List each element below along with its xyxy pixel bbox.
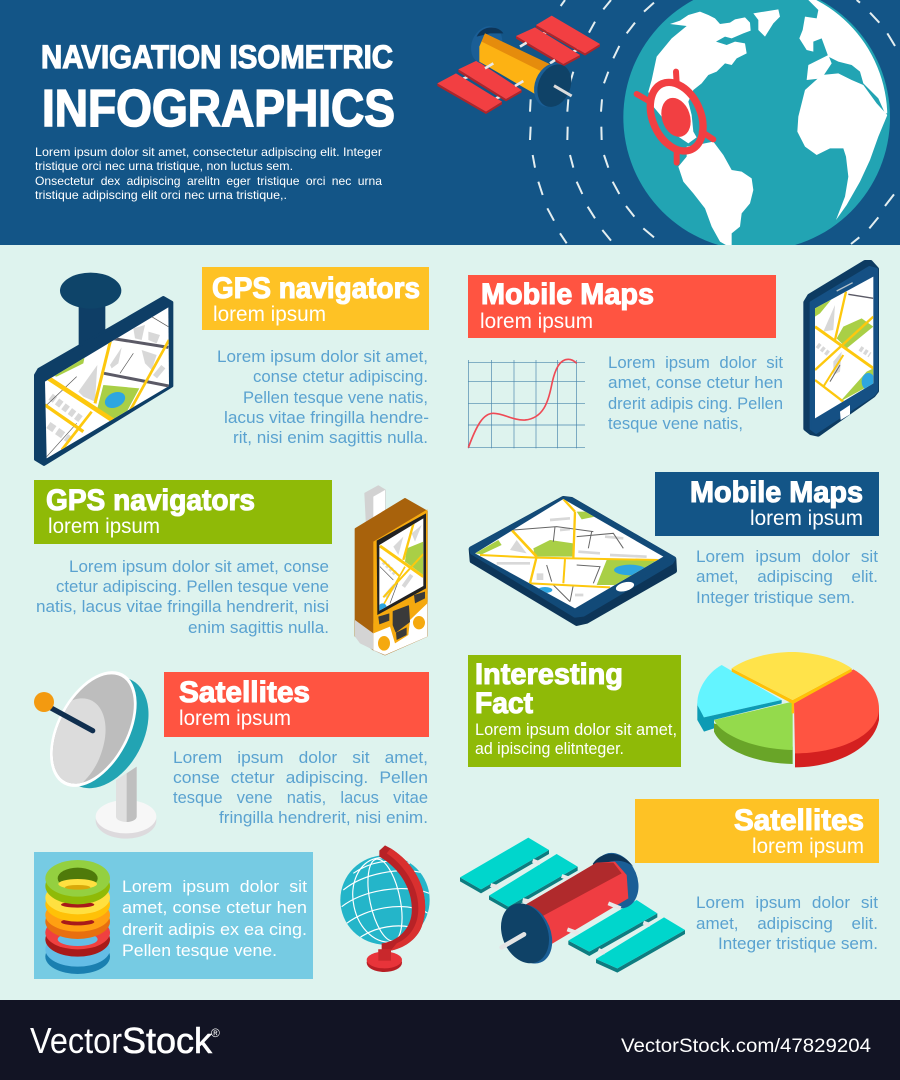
heading: Mobile Maps red: lorem ipsum xyxy=(480,310,593,333)
heading: Mobile Maps red xyxy=(468,275,776,338)
callout: Interesting Fact: Lorem ipsum dolor sit amet, xyxy=(475,720,677,739)
heading: Mobile Maps blue: Mobile Maps xyxy=(690,476,863,509)
footer url: VectorStock.com/47829204 xyxy=(621,1036,871,1057)
text block: GPS navigators: lacus vitae fringilla hendre- xyxy=(224,408,429,427)
icon: car GPS navigator xyxy=(35,273,172,465)
text block: rings callout: Pellen tesque vene. xyxy=(122,941,277,960)
text block: Satellites red: tesque vene natis, lacus vitae xyxy=(173,788,428,807)
panel: Mobile Maps red xyxy=(468,262,877,448)
heading: Satellites yellow: lorem ipsum xyxy=(752,835,864,858)
line chart xyxy=(468,359,585,448)
text block: GPS navigators xyxy=(217,347,429,447)
heading: Satellites red: Satellites xyxy=(179,676,310,709)
text block: GPS navigators: Lorem ipsum dolor sit amet, xyxy=(217,347,428,366)
text block: Mobile Maps red: Lorem ipsum dolor sit xyxy=(608,353,783,372)
text block: rings callout: drerit adipis ex ea cing. xyxy=(122,920,307,939)
text block: Mobile Maps blue: amet, adipiscing elit. xyxy=(696,567,878,586)
text block: Mobile Maps red xyxy=(608,353,783,433)
heading: Satellites red xyxy=(164,672,429,737)
callout: Interesting Fact xyxy=(468,655,681,767)
panel: rings callout xyxy=(34,852,313,979)
text block: GPS navigators: conse ctetur adipiscing. xyxy=(253,367,428,386)
callout: Interesting Fact: ad ipiscing elitnteger. xyxy=(475,739,624,758)
text block: Mobile Maps red: tesque vene natis, xyxy=(608,414,743,433)
panel: GPS navigators car unit xyxy=(35,267,429,465)
text block: GPS navigators: rit, nisi enim sagittis nulla. xyxy=(233,428,428,447)
text block: handheld: natis, lacus vitae fringilla hendrerit, nisi xyxy=(36,597,329,616)
title xyxy=(41,39,395,138)
text block: Satellites red: fringilla hendrerit, nisi enim. xyxy=(219,808,428,827)
text block: Mobile Maps blue: Integer tristique sem. xyxy=(696,588,855,607)
text block: handheld: ctetur adipiscing. Pellen tesque vene xyxy=(56,577,329,596)
icon: stacked rings xyxy=(45,860,110,974)
text block: Satellites yellow: amet, adipiscing elit. xyxy=(696,914,878,933)
footer logo: Vector xyxy=(30,1020,122,1061)
text block: rings callout xyxy=(122,877,307,960)
panel: Satellites yellow xyxy=(460,799,879,973)
header text block: tristique orci nec urna tristique, non luctus sem. xyxy=(35,159,293,173)
text block: Satellites yellow: Lorem ipsum dolor sit xyxy=(696,893,878,912)
panel: interesting fact xyxy=(468,652,879,767)
heading: GPS navigators green: lorem ipsum xyxy=(48,515,160,538)
text block: Mobile Maps red: drerit adipis cing. Pellen xyxy=(608,394,783,413)
heading: GPS navigators yellow xyxy=(202,267,429,330)
panel: Satellites red xyxy=(32,657,429,839)
text block: Mobile Maps red: amet, conse ctetur hen xyxy=(608,373,783,392)
icon: tablet map xyxy=(471,498,675,624)
text block: rings callout: Lorem ipsum dolor sit xyxy=(122,877,307,896)
footer bar xyxy=(0,1000,900,1080)
footer logo: Stock xyxy=(122,1020,213,1061)
icon: red satellite xyxy=(460,838,685,973)
text block: Satellites red xyxy=(173,748,428,827)
heading: Satellites red: lorem ipsum xyxy=(179,707,291,730)
pie chart xyxy=(697,652,879,767)
text block: Satellites red: Lorem ipsum dolor sit amet, xyxy=(173,748,428,767)
icon: satellite dish xyxy=(34,671,156,838)
text block: Mobile Maps blue xyxy=(696,547,878,607)
panel: Mobile Maps blue xyxy=(471,472,879,624)
text block: handheld xyxy=(36,557,329,637)
target marker xyxy=(637,72,713,163)
header text block: tristique adipiscing elit orci nec urna tristique,. xyxy=(35,188,287,202)
heading: GPS navigators green xyxy=(34,480,332,544)
title: INFOGRAPHICS xyxy=(42,80,395,138)
header text block: Lorem ipsum dolor sit amet, consectetur adipiscing elit. Integer xyxy=(35,145,382,159)
text block: GPS navigators: Pellen tesque vene natis, xyxy=(243,388,428,407)
icon: desk globe xyxy=(340,845,430,972)
icon: smartphone map xyxy=(805,262,877,435)
header text block xyxy=(35,145,382,202)
heading: Satellites yellow: Satellites xyxy=(734,804,864,837)
text block: Satellites red: conse ctetur adipiscing. Pellen xyxy=(173,768,428,787)
heading: GPS navigators green: GPS navigators xyxy=(46,484,255,517)
heading: GPS navigators yellow: lorem ipsum xyxy=(213,303,326,326)
text block: Satellites yellow xyxy=(696,893,878,953)
header panel xyxy=(0,0,900,251)
text block: Satellites yellow: Integer tristique sem. xyxy=(718,934,878,953)
heading: GPS navigators yellow: GPS navigators xyxy=(212,272,420,305)
title: NAVIGATION ISOMETRIC xyxy=(41,39,393,75)
callout: Interesting Fact: Fact xyxy=(475,687,533,720)
heading: Mobile Maps red: Mobile Maps xyxy=(481,278,654,311)
heading: Mobile Maps blue xyxy=(655,472,879,536)
callout: Interesting Fact: Interesting xyxy=(475,658,623,691)
text block: rings callout: amet, conse ctetur hen xyxy=(122,898,307,917)
icon: handheld GPS device xyxy=(355,486,427,656)
text block: handheld: Lorem ipsum dolor sit amet, conse xyxy=(69,557,329,576)
header text block: Onsectetur dex adipiscing arelitn eger tristique orci nec urna xyxy=(35,174,382,188)
footer logo xyxy=(30,1020,220,1061)
text block: handheld: enim sagittis nulla. xyxy=(188,618,329,637)
heading: Satellites yellow xyxy=(635,799,879,863)
globe illustration with orbits and target xyxy=(530,0,897,251)
text block: Mobile Maps blue: Lorem ipsum dolor sit xyxy=(696,547,878,566)
panel: GPS navigators handheld xyxy=(34,480,427,656)
heading: Mobile Maps blue: lorem ipsum xyxy=(750,507,863,530)
footer logo: ® xyxy=(211,1026,220,1040)
satellite in orbit xyxy=(437,16,600,114)
